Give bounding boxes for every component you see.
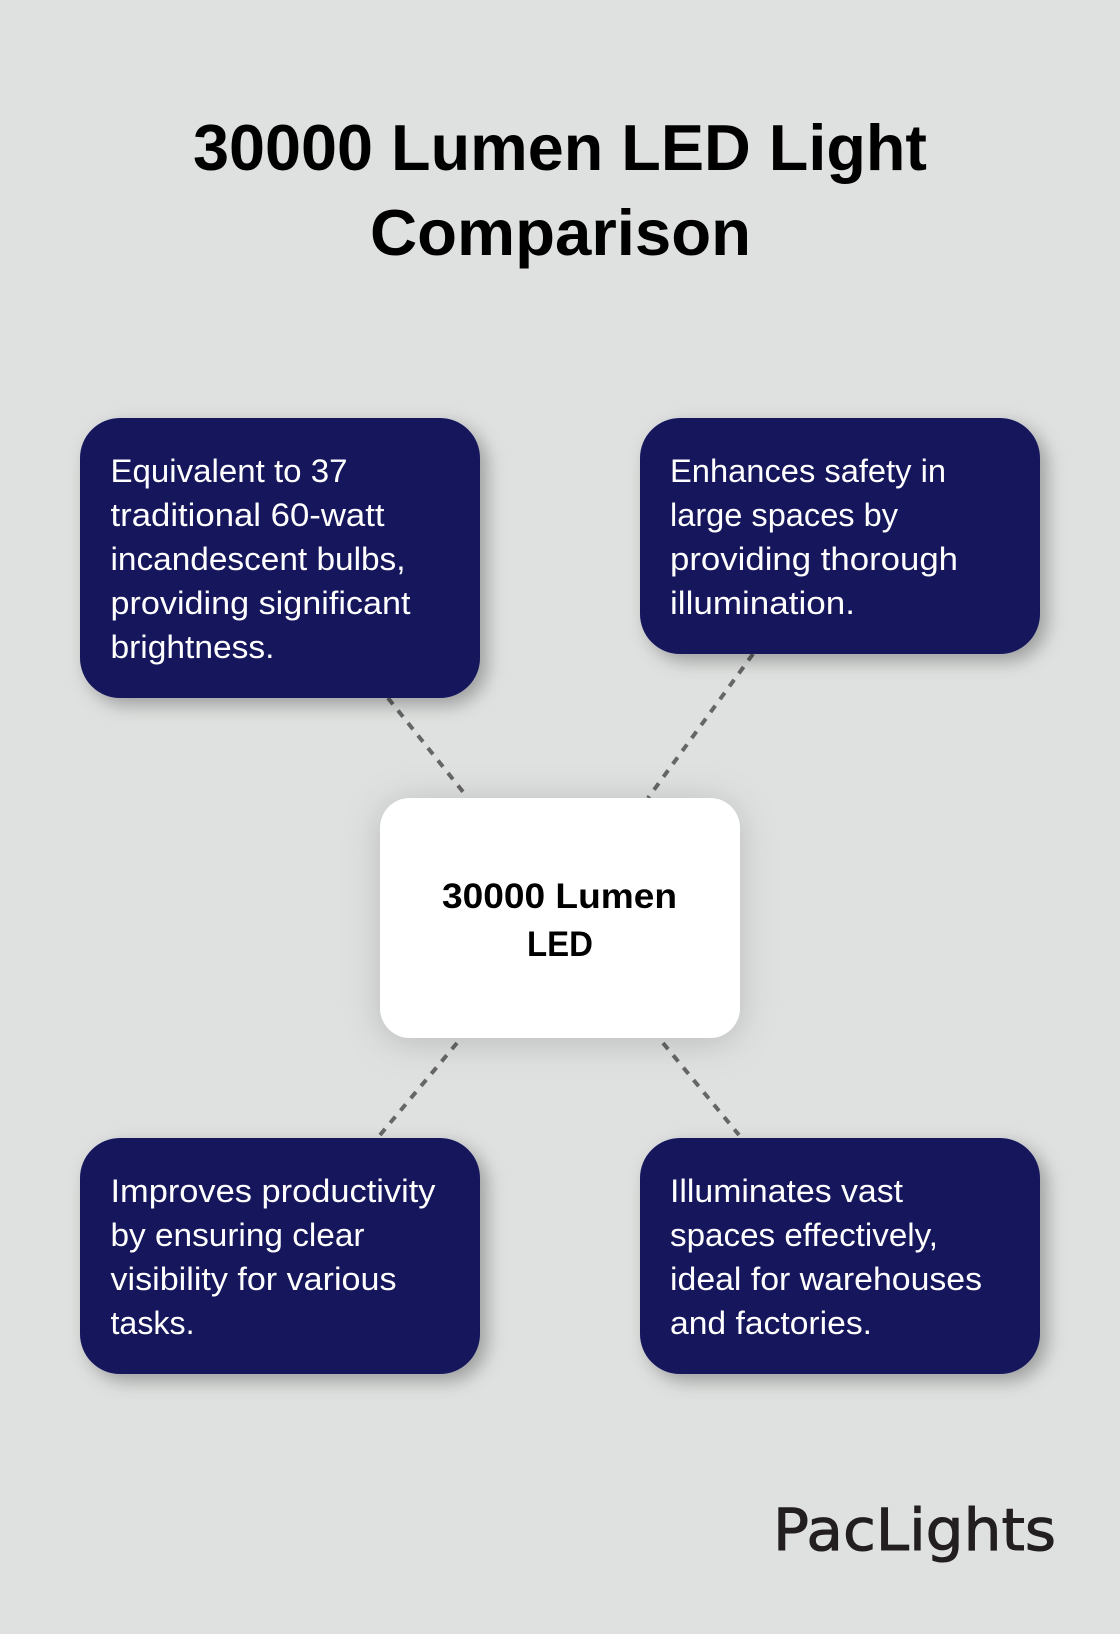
panel: safety: illumination. xyxy=(670,585,855,621)
panel: vast spaces: spaces effectively, xyxy=(670,1217,938,1253)
panel: centre node xyxy=(380,798,740,1038)
panel: productivity: tasks. xyxy=(110,1305,194,1341)
logo: PacLights: PacLights xyxy=(773,1496,1056,1564)
panel: brightness equivalent xyxy=(80,418,480,698)
connector: bottom-right card to centre xyxy=(663,1043,739,1135)
connector: top-left card to centre xyxy=(388,698,468,798)
panel: vast spaces: and factories. xyxy=(670,1305,872,1341)
panel: productivity xyxy=(80,1138,480,1374)
panel: brightness equivalent: incandescent bulbs, xyxy=(110,541,406,577)
title: Comparison xyxy=(370,196,751,269)
connector: top-right card to centre xyxy=(648,654,753,798)
title: 30000 Lumen LED Light xyxy=(193,111,927,184)
connector: bottom-left card to centre xyxy=(380,1043,457,1135)
panel: centre node: 30000 Lumen xyxy=(442,877,677,916)
panel: safety: Enhances safety in xyxy=(670,453,946,489)
panel: productivity: visibility for various xyxy=(110,1261,396,1297)
title xyxy=(193,111,927,269)
panel: safety: providing thorough xyxy=(670,541,958,577)
panel: brightness equivalent: traditional 60-watt xyxy=(110,497,385,533)
panel: productivity: Improves productivity xyxy=(110,1173,436,1209)
panel: brightness equivalent: providing significant xyxy=(110,585,411,621)
panel: productivity: by ensuring clear xyxy=(110,1217,365,1253)
panel: safety: large spaces by xyxy=(670,497,898,533)
panel: vast spaces: ideal for warehouses xyxy=(670,1261,982,1297)
panel: safety xyxy=(640,418,1040,654)
panel: vast spaces xyxy=(640,1138,1040,1374)
panel: brightness equivalent: brightness. xyxy=(110,629,274,665)
panel: vast spaces: Illuminates vast xyxy=(670,1173,903,1209)
panel: centre node: LED xyxy=(527,925,593,964)
panel: brightness equivalent: Equivalent to 37 xyxy=(110,453,348,489)
